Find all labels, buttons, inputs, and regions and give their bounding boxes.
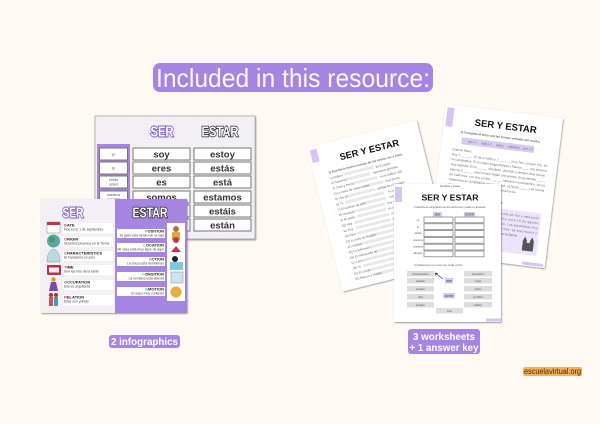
match tags: ESTAR	[445, 294, 453, 298]
exercise list: de Puerto Rico.	[392, 212, 413, 221]
SER uses list: TIME	[64, 264, 74, 270]
heading: ESTAR: ESTAR	[202, 124, 239, 140]
exercise list: hermanas gemelas.	[372, 164, 399, 175]
exercise list: 1) Andrea	[330, 173, 343, 180]
conjugation grid: yo	[417, 219, 420, 222]
exercise list: martes.	[391, 209, 402, 215]
title: Included in this resource:	[156, 63, 430, 93]
exercise list: en casa hoy.	[388, 203, 405, 211]
ESTAR verb column: estoy	[210, 150, 236, 160]
ESTAR uses list: CONDITION	[142, 272, 164, 276]
reading box: del Mundo.	[474, 233, 489, 239]
label: 2 infographics: 2 infographics	[111, 336, 178, 348]
SER verb column: eres	[152, 164, 171, 174]
exercise list: 18) Tú	[352, 264, 362, 271]
conjugation grid	[413, 217, 484, 257]
exercise list: en casa.	[387, 187, 400, 194]
word chips: relation	[474, 303, 483, 307]
icon: globe	[47, 234, 60, 248]
worksheet tab	[395, 187, 402, 202]
exercise list: en el edificio 100.	[380, 169, 403, 179]
reading box: que está en América del Sur y está junto	[477, 209, 539, 220]
exercise list: 14) Ustedes	[347, 241, 364, 249]
ESTAR uses list: El sapo muy contento	[131, 292, 164, 296]
SER verb column: soy	[153, 150, 170, 160]
heading: SER: SER	[150, 124, 174, 140]
letter text: muy especial. Él no ______ simpático, divertido y siempre tiene tiempo.	[450, 161, 547, 178]
ESTAR uses list: POSITION	[145, 228, 164, 234]
instruction: 1) Escribe la conjugación de los verbos ser y estar en presente.	[414, 205, 486, 209]
exercise list: 3) Carla y María	[332, 181, 354, 190]
icon: worker	[49, 277, 58, 291]
word chips: time	[447, 309, 453, 313]
worksheet: conjugate and match	[394, 184, 501, 322]
heading: SER: SER	[62, 204, 84, 222]
letter text: 4) Lee el texto y contesta las preguntas.	[447, 194, 504, 205]
icon: clock	[47, 265, 61, 275]
letter text: Querido Mario,	[452, 147, 473, 154]
instruction: 3) Completa el texto con las formas verbales del cuadro.	[460, 130, 541, 144]
SER verb column: es	[156, 178, 167, 188]
ESTAR uses list: EMOTION	[145, 286, 164, 292]
ESTAR verb column: están	[210, 220, 235, 232]
icon: family	[49, 293, 58, 306]
exercise list: de Ecuador.	[375, 161, 392, 169]
conjugation grid: ellos/as	[414, 251, 423, 255]
SER uses list	[63, 222, 113, 305]
exercise list: la casa.	[410, 261, 421, 267]
exercise list: enfadada.	[404, 245, 418, 252]
ESTAR verb column: estamos	[203, 192, 242, 204]
exercise list: 1) Escribe la forma correcta de los verbos ser y estar.	[328, 152, 403, 174]
reading box	[454, 203, 541, 256]
exercise list: 2) Nosotras	[331, 177, 347, 185]
SER verb column	[133, 148, 190, 231]
SER uses list: RELATION	[64, 294, 84, 300]
ESTAR uses list: Mi casa está muy lejos de aquí	[117, 248, 164, 252]
exercise list: muy pronto	[385, 175, 401, 183]
ESTAR uses list: La chica está durmiendo	[127, 262, 164, 266]
pronoun column: él/ella	[109, 178, 118, 182]
instruction: 2) Relaciona los usos de cada verbo.	[414, 263, 464, 267]
exercise list: 7) El examen de latín	[337, 201, 366, 212]
ESTAR verb column: está	[213, 178, 233, 188]
exercise list: 10) Hoy	[341, 221, 353, 228]
exercise list: 13) La casa de Marcos	[345, 232, 376, 244]
exercise list	[328, 152, 430, 281]
SER uses list: ORIGIN	[64, 236, 78, 242]
ESTAR verb column: estás	[210, 164, 235, 174]
icon: ghost	[47, 249, 60, 262]
SER uses list: Hoy es el 1 de septiembre	[64, 228, 104, 232]
verb strip: estoy	[496, 143, 504, 148]
verb strip: es x 4	[468, 140, 477, 145]
SER verb column: somos	[146, 192, 177, 204]
word chips: position	[416, 279, 426, 283]
SER uses list: Ellas son primas	[64, 300, 89, 304]
SER uses list: Nosotros pisamos en la Tierra	[64, 242, 109, 246]
verb strip	[461, 137, 535, 153]
ESTAR verb column: estáis	[209, 206, 236, 218]
exercise list: 16) El restaurante no	[349, 249, 378, 260]
match tags: SER	[446, 279, 452, 283]
letter text: mi cumpleaños. En mi mejor amiga Melania y Marcos ____ una persona	[451, 157, 547, 173]
word chips: origin	[475, 279, 482, 283]
exercise list: inteligente y divertido.	[376, 180, 406, 191]
icon: cathedral	[522, 236, 534, 252]
exercise list: 17) Laura	[351, 258, 364, 265]
reading box: a Paraguay. Tiene unos 19 de agosto	[476, 214, 539, 225]
icon column	[167, 223, 185, 301]
column tags: ESTAR	[465, 212, 474, 216]
exercise list: 9) Mi padre	[340, 215, 356, 222]
exercise list: 8) Vosotros	[339, 209, 355, 217]
column tags	[433, 212, 475, 216]
pronoun column: nosotros	[107, 193, 120, 197]
SER uses list: Son las tres de la tarde	[64, 270, 99, 274]
word chips: action	[475, 287, 482, 291]
ESTAR uses list: La ventana está abierta	[129, 276, 164, 280]
pronoun column: nosotras	[107, 198, 120, 202]
panel: uses infographic	[41, 199, 187, 313]
worksheet: fill in the blanks	[307, 121, 452, 292]
panel: conjugation infographic	[95, 116, 255, 239]
exercise list: 4) La clase de matemáticas	[333, 183, 370, 196]
conjugation grid: tú	[417, 225, 420, 229]
pronoun column: tú	[112, 166, 115, 170]
worksheet heading: SER Y ESTAR	[422, 192, 479, 202]
ESTAR uses list: El gato está dentro de la caja	[120, 234, 164, 238]
verb strip: son x 2	[523, 146, 533, 151]
worksheet heading: SER Y ESTAR	[474, 118, 537, 136]
label: 3 worksheets + 1 answer key: 3 worksheets	[413, 331, 475, 343]
word chips: location	[416, 303, 426, 307]
letter text: Marcos 5 ______ aquí porque hagan una prueba. Es guitarrista _____	[450, 167, 546, 183]
worksheet footer tag	[522, 261, 543, 267]
SER uses list: Ella es arquitecta	[64, 284, 90, 288]
exercise list: 6) Tú	[336, 201, 344, 206]
verb strip: está x 2	[481, 141, 492, 146]
word chips	[407, 271, 492, 314]
exercise list: son difíciles.	[389, 191, 406, 199]
ESTAR uses list: LOCATION	[143, 242, 164, 248]
conjugation grid: nosotros	[413, 238, 424, 242]
exercise list: cerrada.	[399, 224, 411, 231]
SER uses list: El Fantasma es azul	[64, 256, 95, 260]
ESTAR uses list	[117, 228, 165, 296]
worksheet footer tag	[486, 318, 501, 322]
ESTAR verb column	[194, 148, 251, 232]
letter text: Hoy 1 ______ 16 de octubre y 2 ______ muy feliz porque hoy, es	[452, 152, 548, 168]
label: 3 worksheets + 1 answer key: + 1 answer key	[410, 342, 479, 354]
exercise list: 19) El coche	[353, 268, 371, 276]
verb strip: estamos	[508, 144, 520, 150]
letter text: muy ______ y yo ______ pero mi problema hoy es	[448, 182, 516, 194]
SER uses list: DATE	[64, 222, 75, 228]
word chips: emotion	[416, 287, 426, 291]
reading box: es la ciudad de Chile; es muy bueno y	[475, 224, 538, 235]
SER uses list: CHARACTERISTICS	[64, 250, 103, 256]
label: website: escuelavirtual.org	[524, 367, 581, 376]
reading box: también con Chile con la Machu	[475, 228, 518, 238]
exercise list: 20) Marcos y Marina	[355, 271, 383, 281]
exercise list: muy simpáticos.	[386, 196, 408, 205]
worksheet heading: SER Y ESTAR	[339, 138, 400, 162]
exercise list: 12) Ellos	[344, 232, 357, 238]
heading: ESTAR: ESTAR	[132, 204, 168, 222]
arrow	[435, 273, 443, 279]
pronoun column: yo	[112, 152, 115, 156]
word chips: characteristics	[412, 272, 429, 276]
word chips: condition	[473, 295, 484, 299]
match tags	[443, 278, 455, 298]
exercise list: 5) Hoy yo	[335, 194, 348, 201]
word chips: occupation	[472, 272, 485, 276]
letter text	[447, 147, 549, 210]
word chips: date	[418, 295, 424, 299]
worksheet tab	[310, 149, 320, 163]
column tags: SER	[435, 212, 440, 216]
exercise list: 15) La televisión	[348, 245, 371, 254]
SER uses list: OCCUPATION	[64, 280, 90, 284]
exercise list: cerca.	[403, 241, 412, 247]
icon: calendar	[47, 222, 60, 233]
conjugation grid: él/ella	[415, 231, 422, 235]
letter text: de California. Los dos, juntos, ______ hablando cumpleañitos. Ahora	[449, 172, 545, 188]
label: 3 worksheets + 1 answer key	[408, 329, 480, 354]
pronoun column	[97, 144, 130, 234]
ESTAR uses list: ACTION	[149, 256, 164, 262]
worksheet header: Nombre y clase	[440, 184, 460, 188]
exercise list: 11) Hoy	[343, 227, 354, 233]
letter text: celebrando su cumpleaños con una fiesta. La fiesta _____ y se cuenta	[449, 177, 545, 193]
worksheet tab	[445, 107, 455, 127]
worksheet: complete the text	[428, 104, 563, 268]
pronoun column: usted	[109, 182, 118, 186]
conjugation grid: vosotros	[413, 244, 424, 248]
reading box: es un país soleado. Los estudiantes hoy	[476, 219, 538, 230]
